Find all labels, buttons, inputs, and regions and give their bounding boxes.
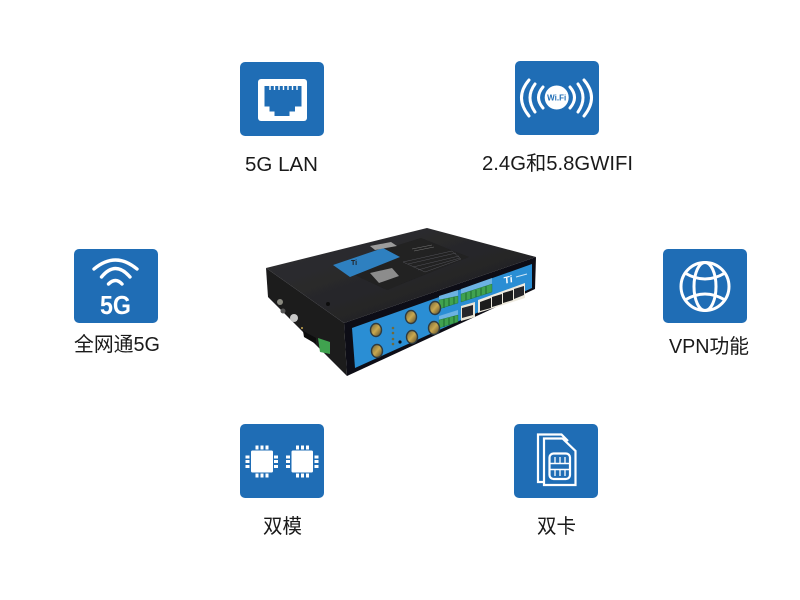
indicator LEDs [392, 327, 402, 345]
feature: WiFi [482, 61, 633, 175]
four LAN ports [478, 283, 525, 313]
icon: wifi broadcast [515, 61, 599, 135]
router left side [266, 268, 347, 376]
terminal blocks [439, 284, 492, 328]
feature: dual module [240, 424, 324, 538]
icon: SIM cards [514, 424, 598, 498]
label: 双模 [263, 515, 302, 538]
feature: dual SIM [514, 424, 598, 538]
label: 5G LAN [245, 154, 318, 176]
label: VPN功能 [669, 335, 749, 358]
label: 全网通5G [74, 333, 160, 356]
icon: globe [663, 249, 747, 323]
router product photo [266, 228, 536, 376]
top blue label [333, 248, 400, 277]
side green connector [318, 338, 330, 354]
top spec table [403, 245, 461, 272]
router top face [266, 228, 536, 323]
antenna connectors [370, 302, 440, 358]
single LAN port [461, 302, 475, 321]
front logo: Ti [503, 274, 513, 287]
feature: VPN [663, 249, 749, 358]
terminal block labels [439, 278, 492, 320]
icon: wifi broadcast: Wi.Fi [547, 94, 566, 102]
router front face [344, 257, 536, 376]
icon: two chips [240, 424, 324, 498]
top QR sticker [370, 268, 399, 283]
feature: 5G network [74, 249, 160, 356]
side ports and knobs [277, 299, 330, 344]
front blue panel [352, 264, 532, 368]
top dark label area [333, 238, 469, 290]
front logo [503, 274, 527, 287]
icon: ethernet port [240, 62, 324, 136]
feature: 5G LAN [240, 62, 324, 176]
top serial sticker [370, 242, 397, 250]
label: 双卡 [537, 515, 576, 538]
top blue label: Ti [351, 260, 357, 267]
label: 2.4G和5.8GWIFI [482, 152, 633, 175]
icon: 5G signal: 5G [100, 290, 131, 320]
